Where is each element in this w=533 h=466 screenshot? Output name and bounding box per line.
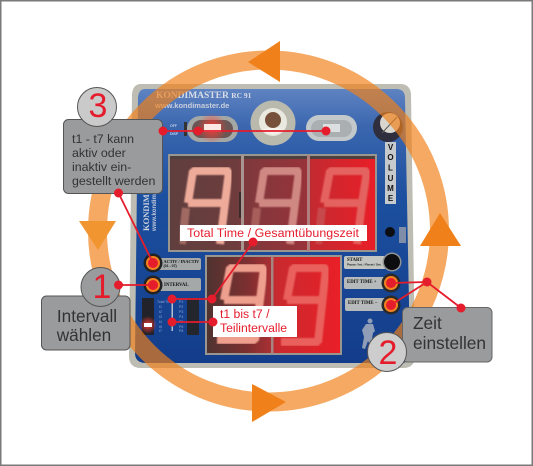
labels: right buttons: START (347, 258, 363, 263)
left LED bar (139, 298, 157, 335)
jack and switch (385, 227, 406, 243)
right LED bar (187, 298, 199, 335)
icon: runner (362, 318, 375, 349)
callout 2 text: einstellen (413, 333, 486, 353)
labels: left buttons (146, 258, 201, 291)
volume label: O (387, 153, 394, 162)
brand text (154, 91, 252, 110)
connector: switches to callout 3 (158, 126, 330, 136)
labels: left buttons: INTERVAL (164, 283, 189, 288)
label: t1 bis t7 (213, 306, 297, 337)
number badge 2: 2 (379, 334, 397, 372)
device: RC 91 control unit (129, 84, 415, 368)
digit 9 (318, 171, 367, 244)
callout 3 text: inaktiv ein- (72, 160, 131, 174)
digit 9 (281, 268, 326, 342)
LED legend: Total Time (157, 300, 173, 304)
volume label: L (388, 164, 393, 172)
labels: left buttons: ACTIV / INACTIV (164, 259, 200, 264)
start button (382, 252, 402, 272)
LED legend: t5 (159, 325, 162, 329)
labels: right buttons (344, 256, 387, 311)
button: activ (144, 254, 162, 272)
connector: callout 1 to interval button (114, 280, 153, 290)
arrow: right, pointing up (420, 213, 461, 246)
LED legend: P3 (179, 310, 183, 314)
button: edit time plus (382, 274, 400, 292)
volume label: M (387, 184, 394, 193)
labels: right buttons: EDIT TIME − (348, 301, 378, 306)
volume label: U (388, 174, 394, 183)
button: interval (144, 276, 162, 294)
speaker socket (250, 100, 296, 146)
digit 9 (253, 171, 299, 244)
callout 3 box (64, 120, 162, 194)
button: edit time minus (382, 296, 400, 314)
volume label: E (388, 194, 394, 203)
arrow: left, pointing down (79, 221, 116, 250)
arrow: bottom, pointing right (252, 384, 286, 422)
digit 9 (182, 171, 229, 244)
LED legend: P4 (179, 315, 183, 319)
switch: activ (170, 113, 238, 143)
connector: callout 3 to activ button (114, 188, 153, 263)
callout 1 text: wählen (56, 325, 111, 345)
callout 1 text: Intervall (57, 306, 117, 326)
number badge 3: 3 (89, 87, 107, 125)
callout 3 (64, 87, 162, 194)
connector: t1 bis t7 to LED bar (168, 318, 218, 326)
device casing (129, 84, 415, 368)
vertical brand text: KONDIMASTER (141, 165, 151, 231)
arrow: top, pointing left (248, 41, 280, 82)
LED legend: P1 (179, 300, 183, 304)
vertical brand text: www.kondimaster.de (152, 171, 158, 232)
brand text: www.kondimaster.de (154, 101, 229, 110)
callout 2 (368, 308, 492, 372)
switch: activ: OFF (170, 124, 177, 128)
brand text: KONDIMASTER RC 91 (156, 91, 252, 101)
label: total time: Total Time / Gesamtübungszeit (187, 226, 360, 240)
callout 3 text: gestellt werden (72, 174, 155, 188)
LED legend: P8 (179, 329, 183, 333)
LED legend: t7 (159, 329, 162, 333)
LED legend: P5 (179, 320, 183, 324)
digit 9 (217, 268, 264, 340)
switch: inactiv (306, 115, 357, 141)
display: total time (168, 154, 377, 252)
labels: right buttons: EDIT TIME + (347, 280, 377, 285)
connector: callout 2 to edit buttons (391, 278, 466, 312)
callout 2 text: Zeit (413, 313, 442, 333)
volume label (385, 142, 396, 204)
volume label: V (388, 143, 394, 152)
LED legend: t1 (159, 305, 162, 309)
LED legend (157, 300, 183, 333)
LED legend: t4 (159, 320, 162, 324)
callout 2 box (402, 308, 492, 362)
display: interval time (205, 255, 342, 355)
volume knob (373, 112, 403, 142)
label: t1 bis t7: Teilintervalle (220, 321, 287, 335)
cycle ring (98, 60, 440, 402)
switch: activ: DISP (170, 132, 179, 136)
control buttons (144, 254, 400, 314)
labels: right buttons: Pause / Int. / Reset / Set. (347, 262, 382, 266)
labels: left buttons: (01 - 07) (164, 264, 177, 268)
callout 1 box (42, 296, 130, 350)
callout 1 (42, 268, 130, 350)
callout 3 text: t1 - t7 kann (72, 132, 134, 146)
LED legend: P2 (179, 305, 183, 309)
vertical brand text (141, 165, 158, 232)
callout 3 text: aktiv oder (72, 146, 126, 160)
LED legend: P6 (179, 325, 183, 329)
LED legend: t3 (159, 315, 162, 319)
blue front panel (135, 89, 410, 363)
LED legend: t2 (159, 310, 162, 314)
number badge 1: 1 (93, 268, 111, 306)
connector: total time to LED bar (168, 238, 258, 304)
label: t1 bis t7: t1 bis t7 / (220, 307, 270, 321)
